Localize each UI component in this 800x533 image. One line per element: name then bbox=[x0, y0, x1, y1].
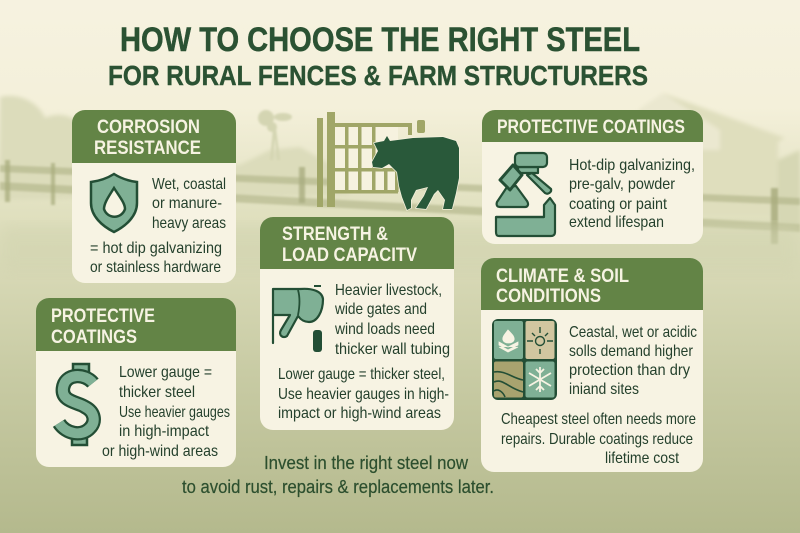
heading: strength: STRENGTH & bbox=[282, 224, 388, 245]
text: corrosion body bbox=[90, 176, 226, 276]
footer call to action: to avoid rust, repairs & replacements later. bbox=[182, 477, 494, 497]
heading: corrosion resistance bbox=[94, 117, 201, 159]
text: coatings body: Hot-dip galvanizing, bbox=[569, 157, 695, 174]
text: gauge body: in high-impact bbox=[119, 423, 209, 440]
text: gauge body: Lower gauge = bbox=[119, 364, 212, 381]
heading: corrosion resistance: RESISTANCE bbox=[94, 138, 201, 159]
illustration: farm gate bbox=[317, 112, 425, 207]
heading: protective coatings bbox=[51, 306, 155, 348]
text: strength body: thicker wall tubing bbox=[335, 341, 450, 358]
text: corrosion body: or manure- bbox=[152, 195, 222, 212]
panel: corrosion resistance bbox=[72, 110, 236, 283]
heading: strength bbox=[282, 224, 417, 266]
text: climate body: Ceastal, wet or acidic bbox=[569, 324, 697, 341]
panel: protective coatings right bbox=[482, 110, 703, 244]
text: strength body: Heavier livestock, bbox=[335, 282, 442, 299]
text: climate body: repairs. Durable coatings reduce bbox=[501, 431, 693, 448]
text: strength body bbox=[278, 282, 450, 422]
icon: dollar sign bbox=[59, 364, 94, 445]
heading: protective coatings right: PROTECTIVE COATINGS bbox=[497, 117, 685, 138]
heading: strength: LOAD CAPACITV bbox=[282, 245, 417, 266]
text: climate body: solls demand higher bbox=[569, 343, 694, 360]
icon: gate bracket hand bbox=[273, 285, 323, 352]
text: coatings body bbox=[569, 157, 695, 231]
panel: protective coatings left bbox=[36, 298, 236, 467]
text: strength body: Use heavier gauges in high- bbox=[278, 386, 449, 403]
title: FOR RURAL FENCES & FARM STRUCTURERS bbox=[108, 60, 648, 91]
heading: climate: CONDITIONS bbox=[496, 286, 601, 307]
icon: four climate quadrants bbox=[492, 319, 557, 400]
text: corrosion body: = hot dip galvanizing bbox=[90, 240, 222, 257]
text: corrosion body: Wet, coastal bbox=[152, 176, 226, 193]
text: gauge body: or high-wind areas bbox=[102, 443, 218, 460]
text: gauge body: thicker steel bbox=[119, 384, 195, 401]
footer call to action: Invest in the right steel now bbox=[264, 453, 469, 473]
heading: protective coatings: COATINGS bbox=[51, 327, 137, 348]
background: windmill bbox=[258, 110, 292, 160]
title bbox=[108, 21, 648, 91]
heading: climate: CLIMATE & SOIL bbox=[496, 266, 629, 287]
footer call to action bbox=[182, 453, 494, 497]
heading: corrosion resistance: CORROSION bbox=[97, 117, 200, 138]
text: climate body: lifetime cost bbox=[605, 450, 679, 467]
title: HOW TO CHOOSE THE RIGHT STEEL bbox=[120, 21, 640, 59]
text: strength body: Lower gauge = thicker steel, bbox=[278, 366, 445, 383]
panel: climate and soil conditions bbox=[481, 258, 703, 472]
text: climate body: Cheapest steel often needs more bbox=[501, 411, 696, 428]
text: coatings body: coating or paint bbox=[569, 196, 667, 213]
heading: protective coatings: PROTECTIVE bbox=[51, 306, 155, 327]
text: gauge body: Use heavier gauges bbox=[119, 404, 230, 421]
text: coatings body: extend lifespan bbox=[569, 214, 664, 231]
panel: strength and load capacity bbox=[260, 217, 454, 430]
text: corrosion body: heavy areas bbox=[152, 215, 226, 232]
text: gauge body bbox=[102, 364, 230, 460]
icon: spray equipment bbox=[496, 153, 555, 236]
text: climate body: iniand sites bbox=[569, 381, 639, 398]
text: strength body: wide gates and bbox=[334, 301, 427, 318]
illustration: cow bbox=[372, 136, 459, 210]
heading: climate bbox=[496, 266, 629, 307]
text: strength body: impact or high-wind areas bbox=[278, 405, 441, 422]
text: coatings body: pre-galv, powder bbox=[569, 176, 676, 193]
text: climate body: protection than dry bbox=[569, 362, 690, 379]
icon: shield with water drop bbox=[91, 174, 137, 232]
text: climate body bbox=[501, 324, 697, 467]
text: strength body: wind loads need bbox=[334, 321, 435, 338]
text: corrosion body: or stainless hardware bbox=[90, 259, 221, 276]
